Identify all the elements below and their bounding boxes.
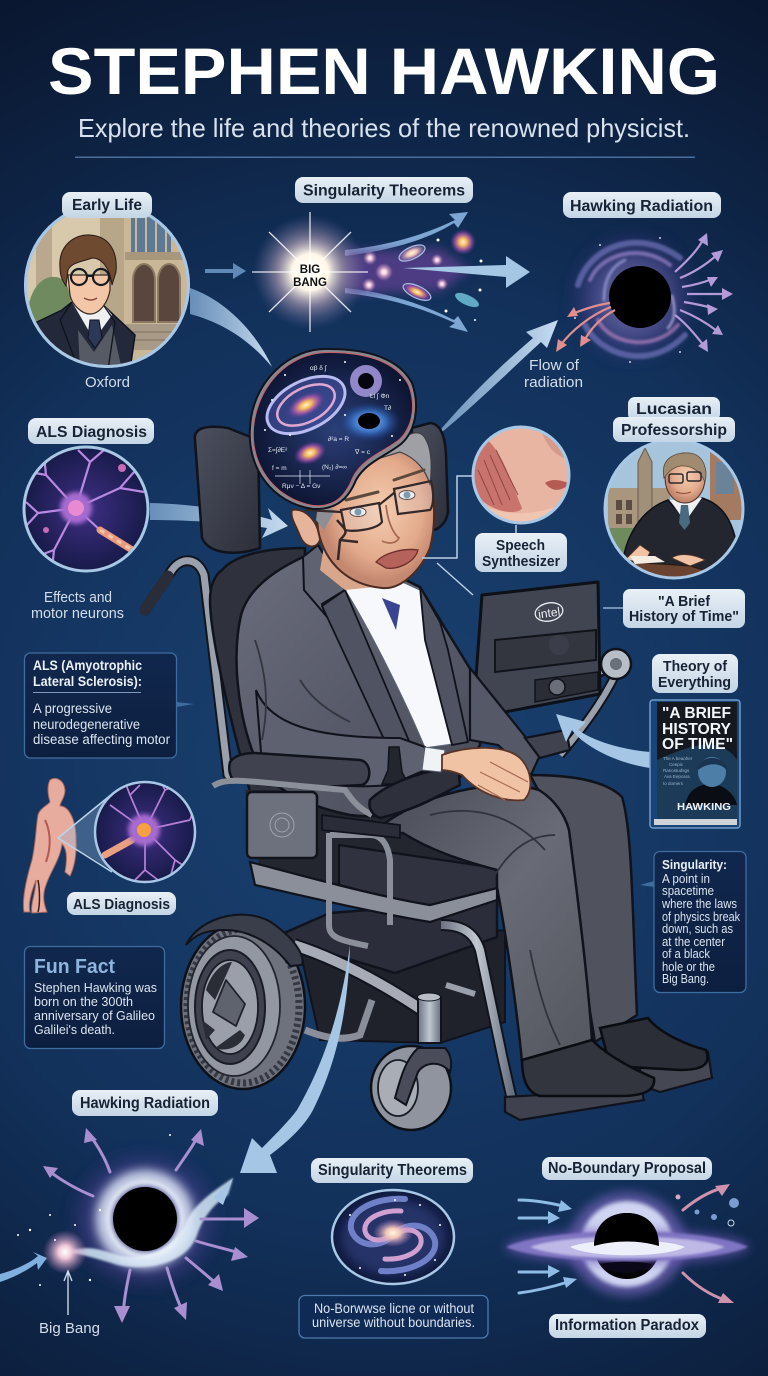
rail below armrest <box>213 781 372 815</box>
caption: Oxford: Oxford <box>85 374 130 391</box>
subtitle: Explore the life and theories of the renowned physicist. <box>78 113 690 143</box>
seat rail <box>250 862 497 922</box>
book: A Brief History of Time: OF TIME" <box>662 736 733 753</box>
equations: f = m <box>272 465 287 472</box>
label: Theory of Everything: Theory of <box>663 658 728 675</box>
book: A Brief History of Time: HAWKING <box>677 801 731 813</box>
label: Theory of Everything <box>652 654 738 693</box>
callout: Singularity definition: of a black <box>662 946 710 961</box>
ring hole <box>350 365 382 397</box>
portrait: Early Life, Oxford <box>24 214 190 368</box>
label: Lucasian Professorship: Professorship <box>621 422 727 439</box>
right sleeve <box>470 668 540 775</box>
callout: Singularity definition: of physics break <box>662 909 740 924</box>
callout: Fun Fact <box>24 946 164 1048</box>
label: ALS Diagnosis (lower): ALS Diagnosis <box>73 896 170 913</box>
callout: Singularity definition: Singularity: <box>662 857 727 872</box>
label: Speech Synthesizer: Speech <box>496 537 545 554</box>
illustration: Big Bang with expansion streams: BIG <box>300 264 320 276</box>
label: Hawking Radiation (top): Hawking Radiation <box>570 198 713 215</box>
label: Singularity Theorems (bottom): Singularity Theorems <box>318 1162 467 1179</box>
speech sensor wire <box>337 520 358 560</box>
callout: Fun Fact: Galilei's death. <box>34 1022 115 1037</box>
leader lines: speech <box>422 476 516 595</box>
book: A Brief History of Time: to domers <box>663 781 684 786</box>
label: Singularity Theorems <box>295 177 473 203</box>
neck <box>320 540 395 590</box>
right armrest <box>525 730 570 758</box>
equations: Ll ∫ Φn <box>370 393 390 400</box>
book: A Brief History of Time: The A beaoher <box>663 756 693 761</box>
label: Singularity Theorems (bottom) <box>311 1158 473 1183</box>
suit jacket <box>237 550 480 816</box>
speech tablet on arm <box>473 582 631 755</box>
blue black hole <box>341 404 399 440</box>
glasses <box>305 481 433 531</box>
illustration: galaxy ellipse <box>332 1190 454 1284</box>
magnifier cone and neuron detail <box>58 780 196 883</box>
brain cutaway with cosmos <box>250 349 420 510</box>
caption: Flow of radiation: radiation <box>524 374 583 391</box>
illustration: black hole accretion disc <box>505 1184 749 1303</box>
illustration: black hole with radiation arrows <box>556 226 733 370</box>
illustration: Big Bang with expansion streams <box>252 212 530 332</box>
callout: Fun Fact: born on the 300th <box>34 994 133 1009</box>
eyes <box>350 508 366 516</box>
label: ALS Diagnosis <box>28 418 154 444</box>
label: Early Life <box>62 192 152 218</box>
title: STEPHEN HAWKING <box>48 34 720 108</box>
wheelchair <box>145 423 712 1130</box>
label: Lucasian Professorship <box>613 397 735 442</box>
front frame and caster <box>371 925 512 1130</box>
label: Speech Synthesizer: Synthesizer <box>482 553 560 570</box>
label: Information Paradox <box>549 1314 706 1338</box>
equations: αβ δ ∫ <box>310 365 327 372</box>
callout: No-Boundary text: universe without boundaries. <box>312 1315 475 1330</box>
illustration: Big Bang with expansion streams: BANG <box>293 277 327 289</box>
callout: Singularity definition: where the laws <box>661 896 737 911</box>
hands <box>442 748 530 800</box>
equations: ∇ = c <box>354 448 371 456</box>
callout: Singularity definition <box>640 852 746 992</box>
equations: ∂²a = R <box>328 436 349 443</box>
lapels <box>303 545 345 618</box>
callout: No-Boundary text: No-Borwwse licne or without <box>314 1301 474 1316</box>
book: A Brief History of Time <box>650 700 740 828</box>
callout: Singularity definition: down, such as <box>662 921 733 936</box>
arrow: ALS to head <box>150 503 288 538</box>
label: ALS Diagnosis (lower) <box>67 892 176 915</box>
callout: Fun Fact: anniversary of Galileo <box>34 1008 155 1023</box>
nose <box>382 505 399 543</box>
callout: A Brief History of Time <box>623 589 745 628</box>
equations: Σ=∫∂E² <box>268 447 288 454</box>
callout: A Brief History of Time: "A Brief <box>658 593 711 610</box>
small galaxy <box>294 442 326 464</box>
portrait: Lucasian Professorship <box>604 439 744 585</box>
label: Speech Synthesizer <box>475 533 567 572</box>
book: A Brief History of Time: "A BRIEF <box>662 705 731 722</box>
callout: Singularity definition: Big Bang. <box>662 971 709 986</box>
callout: ALS definition <box>24 653 194 758</box>
caption: Effects and motor neurons: Effects and <box>44 589 112 606</box>
callout: Fun Fact: Fun Fact <box>34 956 115 978</box>
label: Theory of Everything: Everything <box>658 674 731 691</box>
tubing under armrest <box>329 833 390 946</box>
book: A Brief History of Time: HISTORY <box>662 721 731 738</box>
speech tablet on arm: intel <box>537 605 561 621</box>
callout: Singularity definition: spacetime <box>662 883 714 898</box>
caption: Flow of radiation: Flow of <box>529 357 580 374</box>
sleeve <box>256 690 425 786</box>
figure: human body with ALS <box>23 778 76 913</box>
callout: Singularity definition: A point in <box>662 871 710 886</box>
illustration: motor neuron circle <box>23 446 149 572</box>
callout: ALS definition: ALS (Amyotrophic <box>33 657 142 673</box>
shirt cuff <box>422 747 445 772</box>
control arm <box>369 768 460 818</box>
arrow: chair to lower black hole <box>240 945 350 1173</box>
label: Hawking Radiation (bottom) <box>72 1090 218 1116</box>
silver strut <box>294 945 425 1012</box>
illustration: lower black hole with Big Bang <box>0 1128 259 1323</box>
arrow: Early Life to brain <box>190 288 272 367</box>
magnified face circle <box>470 426 572 530</box>
mouth <box>376 550 418 568</box>
platform <box>275 900 497 973</box>
shirt <box>328 548 468 748</box>
left armrest <box>229 753 369 788</box>
rear wheel <box>181 915 305 1089</box>
equations: T∂ <box>384 405 391 412</box>
left headrest <box>195 427 260 553</box>
callout: Singularity definition: hole or the <box>662 959 715 974</box>
face <box>316 446 434 588</box>
eyebrows <box>346 470 424 500</box>
footplates <box>640 1052 712 1092</box>
cushion <box>339 845 497 905</box>
book: A Brief History of Time: Ceepic <box>669 762 684 767</box>
equations: Rμν − Δ = Gν <box>282 483 320 490</box>
lower base <box>300 930 505 1043</box>
dark seat frame behind control box <box>245 790 505 922</box>
book: A Brief History of Time: Ranostudsgs <box>663 768 690 773</box>
ear <box>292 510 320 546</box>
galaxy <box>266 374 346 436</box>
label: Hawking Radiation (bottom): Hawking Radiation <box>80 1095 210 1112</box>
control box <box>247 792 317 858</box>
hair <box>380 433 431 485</box>
callout: No-Boundary text <box>299 1296 488 1338</box>
callout: Fun Fact: Stephen Hawking was <box>34 980 157 995</box>
equations <box>268 365 391 490</box>
label: ALS Diagnosis: ALS Diagnosis <box>36 424 147 441</box>
arrow: Early Life to Big Bang <box>205 263 246 279</box>
shoes <box>600 1018 708 1070</box>
callout: A Brief History of Time: History of Time" <box>629 608 739 625</box>
callout: ALS definition: disease affecting motor <box>33 732 170 747</box>
book: A Brief History of Time: Ava Eepcara <box>664 774 690 779</box>
callout: ALS definition: neurodegenerative <box>33 717 140 732</box>
label: Singularity Theorems: Singularity Theorems <box>303 182 465 200</box>
label: Hawking Radiation (top) <box>563 192 721 218</box>
rear trouser leg <box>530 775 637 1042</box>
arrow: brain to Hawking Radiation <box>431 320 558 441</box>
right headrest <box>410 423 448 530</box>
equations: (N₂) ∂=∞ <box>322 464 347 471</box>
frame tubes and push handle <box>145 561 228 775</box>
callout: ALS definition: A progressive <box>33 701 112 716</box>
callout: Singularity definition: at the center <box>662 934 726 949</box>
backrest <box>210 548 305 820</box>
caption: Effects and motor neurons: motor neurons <box>31 605 124 622</box>
label: Early Life: Early Life <box>72 197 142 214</box>
joystick <box>382 747 408 784</box>
caption: Effects and motor neurons <box>31 589 124 622</box>
arrow: book to tablet <box>556 714 650 768</box>
callout: ALS definition: Lateral Sclerosis): <box>33 673 142 689</box>
leader: Big Bang <box>64 1271 72 1315</box>
front trouser leg <box>370 786 592 1062</box>
label: No-Boundary Proposal: No-Boundary Proposal <box>548 1160 706 1177</box>
label: Lucasian Professorship: Lucasian <box>636 401 712 418</box>
figure: Stephen Hawking seated <box>213 433 708 1096</box>
caption: Flow of radiation <box>524 357 583 391</box>
label: No-Boundary Proposal <box>542 1157 712 1180</box>
caption: Big Bang: Big Bang <box>39 1320 100 1337</box>
label: Information Paradox: Information Paradox <box>555 1317 699 1334</box>
